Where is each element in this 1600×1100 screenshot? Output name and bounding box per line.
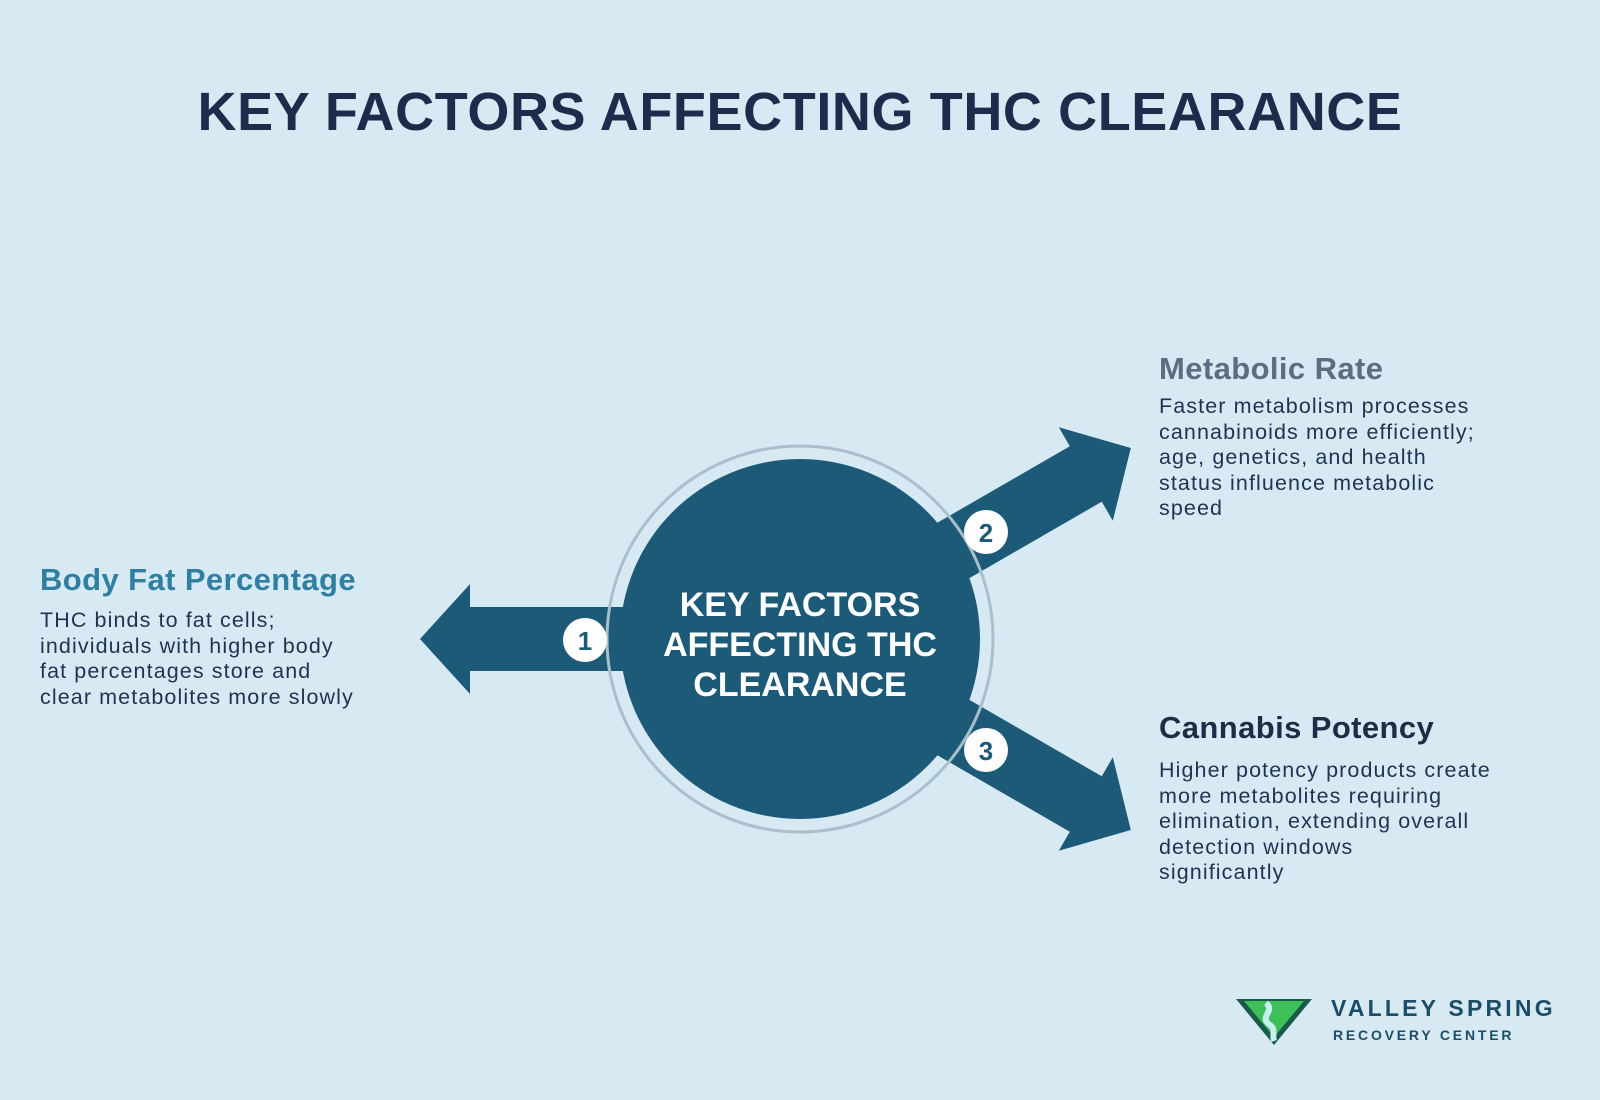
text block: cannabis potency: Higher potency products create: [1159, 758, 1491, 782]
central circle: [620, 459, 980, 819]
text block: metabolic rate: speed: [1159, 496, 1223, 520]
arrow 3 lower right: [903, 667, 1158, 877]
central circle: CLEARANCE: [693, 666, 907, 704]
text block: body fat: THC binds to fat cells;: [40, 608, 276, 632]
icon: valley triangle: [1236, 999, 1312, 1045]
text block: metabolic rate: Metabolic Rate: [1159, 351, 1383, 386]
text block: metabolic rate: Faster metabolism processes: [1159, 394, 1470, 418]
text block: cannabis potency: more metabolites requiring: [1159, 784, 1442, 808]
badge 2: 2: [979, 518, 993, 548]
arrow 2 upper right: [903, 401, 1158, 611]
badge 3: [964, 728, 1008, 772]
text block: body fat: [40, 562, 356, 708]
text block: body fat: fat percentages store and: [40, 659, 311, 683]
text block: cannabis potency: elimination, extending overall: [1159, 809, 1469, 833]
arrow 1 left: [420, 584, 650, 694]
text block: cannabis potency: [1159, 710, 1491, 884]
logo: RECOVERY CENTER: [1333, 1027, 1514, 1043]
central circle: AFFECTING THC: [663, 626, 937, 664]
text block: cannabis potency: significantly: [1159, 860, 1284, 884]
central circle: KEY FACTORS: [680, 586, 920, 624]
badge 2: [964, 510, 1008, 554]
badge 1: 1: [578, 626, 592, 656]
badge 1: [563, 618, 607, 662]
text block: metabolic rate: cannabinoids more efficiently;: [1159, 420, 1475, 444]
text block: metabolic rate: [1159, 351, 1475, 520]
title: KEY FACTORS AFFECTING THC CLEARANCE: [197, 82, 1403, 142]
text block: metabolic rate: status influence metabolic: [1159, 470, 1435, 494]
text block: body fat: individuals with higher body: [40, 634, 334, 658]
badge 3: 3: [979, 736, 993, 766]
logo: [1236, 995, 1556, 1045]
text block: cannabis potency: detection windows: [1159, 834, 1353, 858]
text block: metabolic rate: age, genetics, and health: [1159, 445, 1427, 469]
text block: body fat: clear metabolites more slowly: [40, 684, 354, 708]
outer ring: [607, 446, 993, 832]
text block: cannabis potency: Cannabis Potency: [1159, 710, 1434, 745]
text block: body fat: Body Fat Percentage: [40, 562, 356, 597]
logo text: VALLEY SPRING: [1331, 995, 1556, 1021]
